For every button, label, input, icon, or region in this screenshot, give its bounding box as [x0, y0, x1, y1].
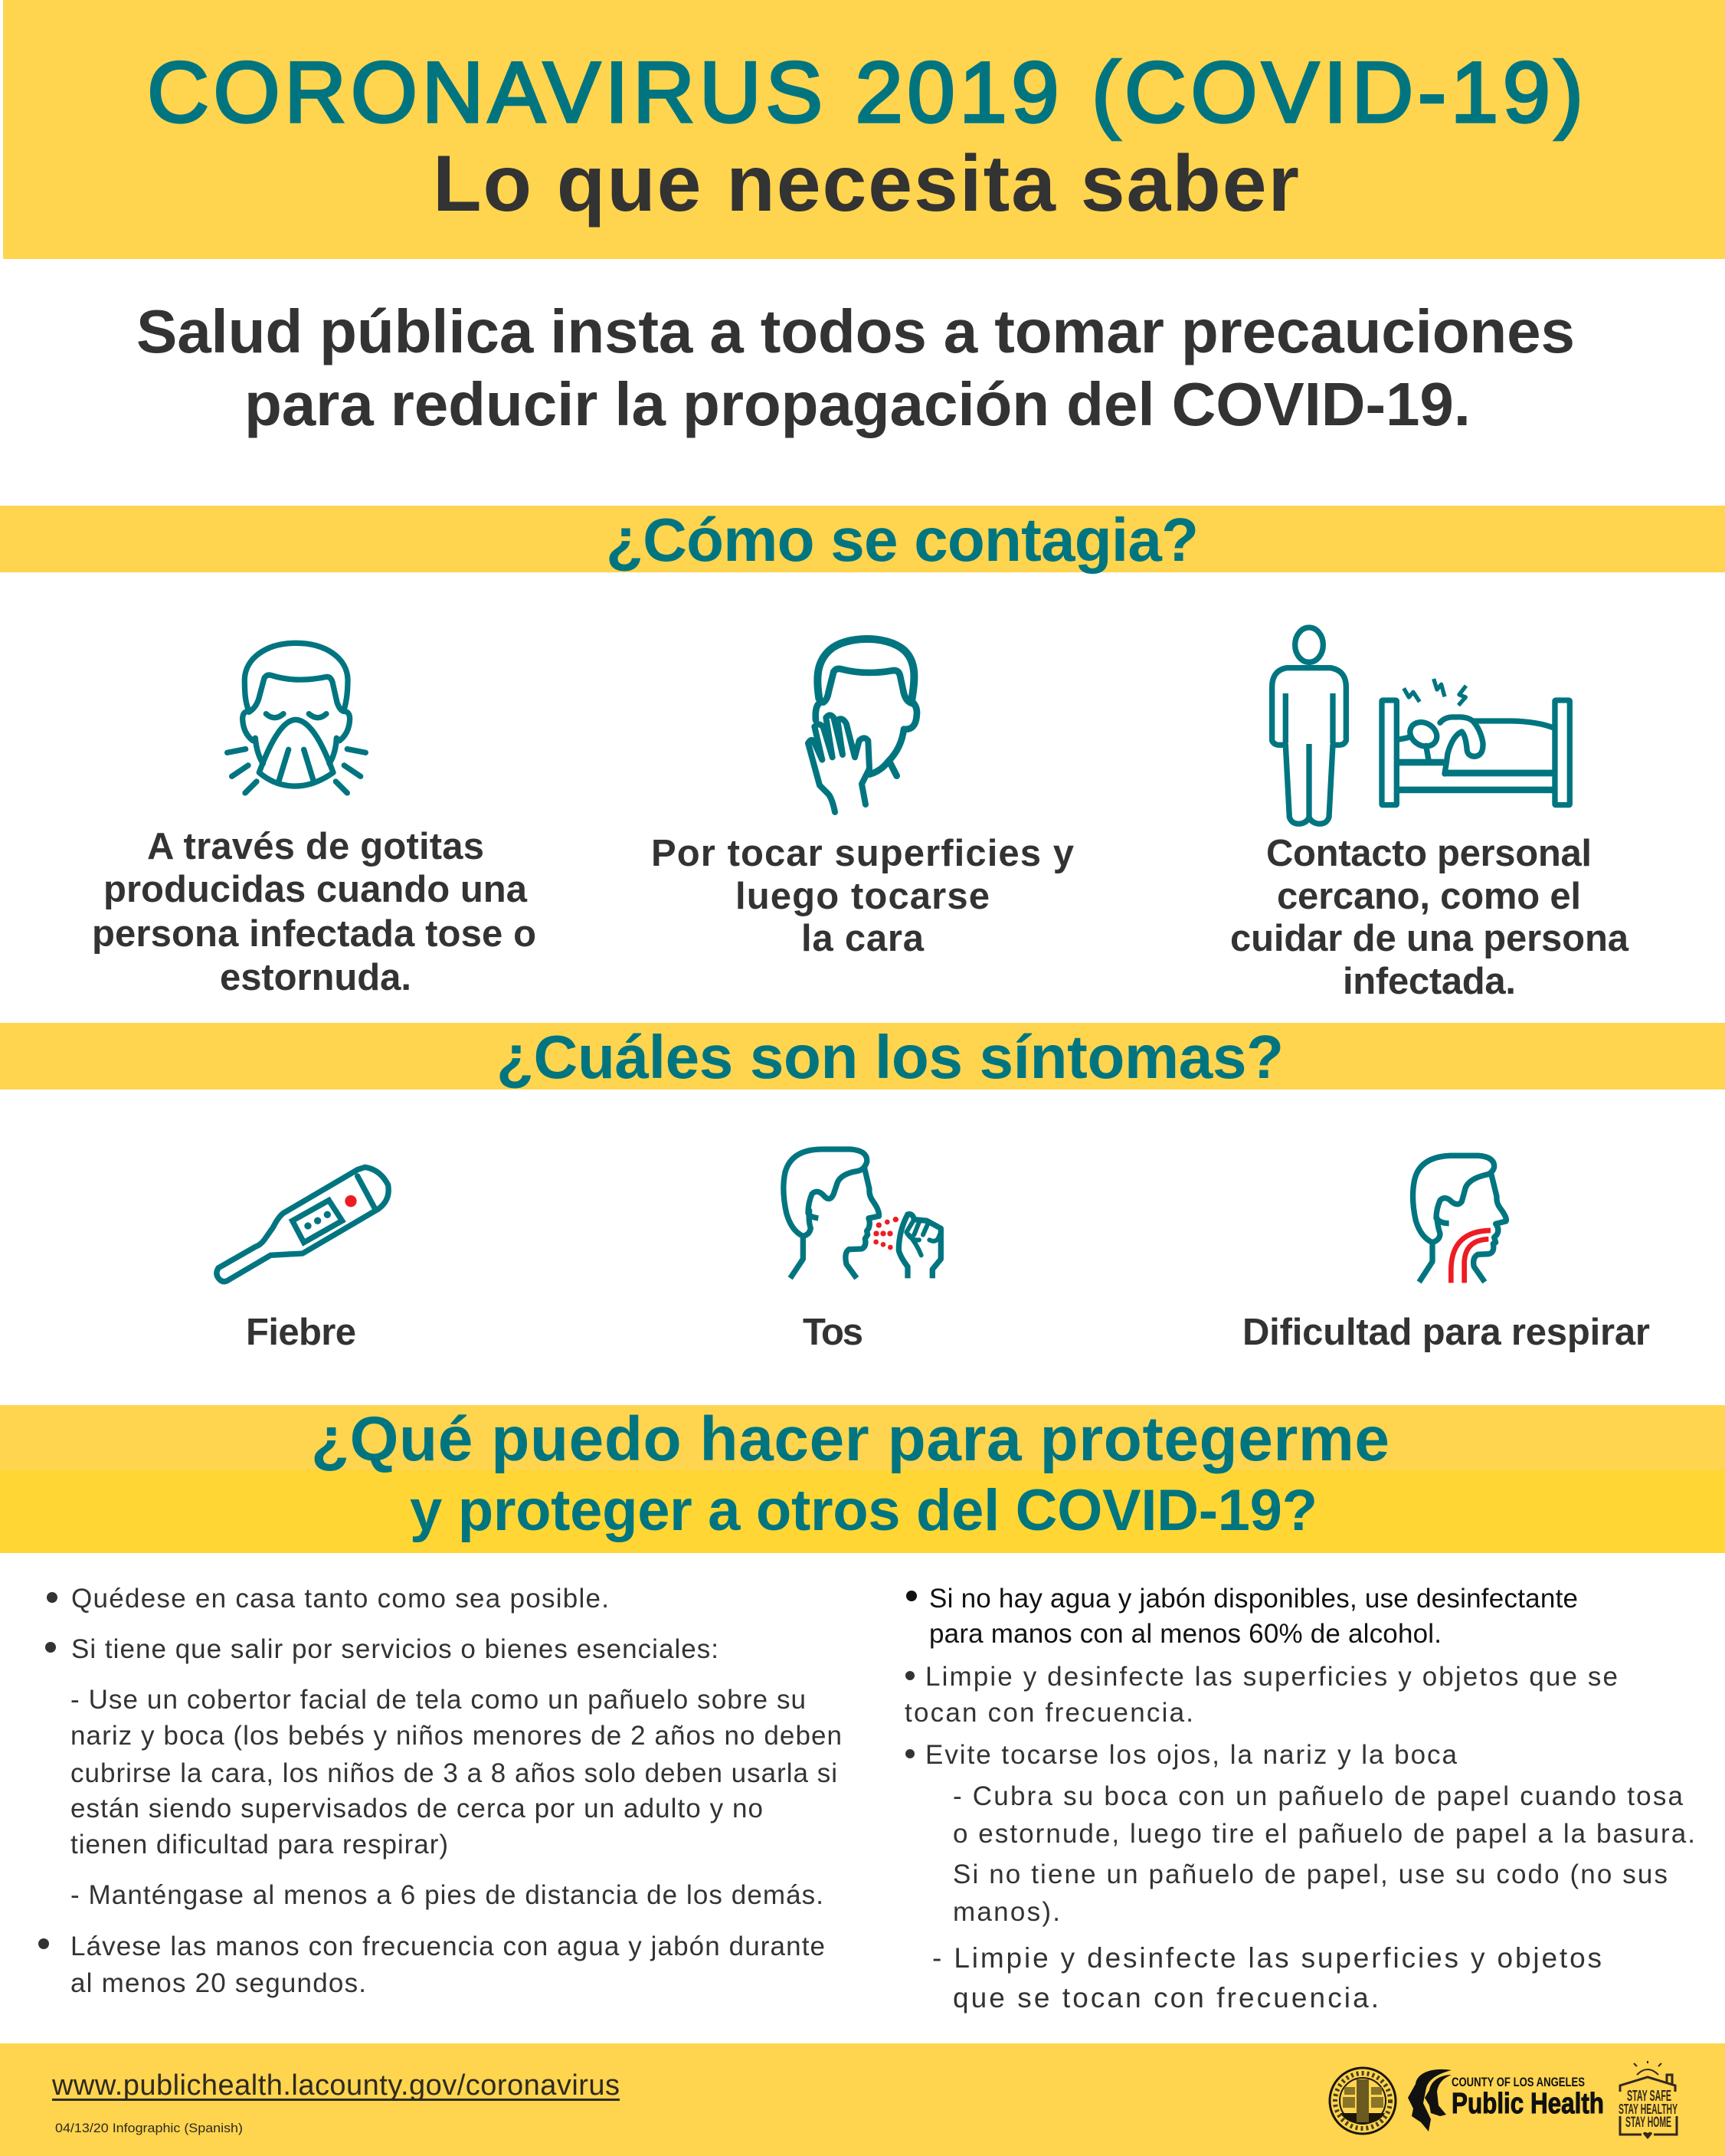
section heading: symptoms	[0, 1023, 1725, 1091]
panel: right protective advice: Limpie y desinfecte las superficies y objetos que se	[925, 1662, 1618, 1692]
section heading: symptoms: ¿Cuáles son los síntomas?	[496, 1023, 1284, 1091]
panel: right protective advice: que se tocan con frecuencia.	[953, 1982, 1379, 2013]
caption: close contact	[1230, 833, 1629, 1002]
caption: droplets: producidas cuando una	[103, 869, 528, 910]
panel: right protective advice: - Cubra su boca con un pañuelo de papel cuando tosa	[953, 1781, 1684, 1811]
panel: left protective advice: nariz y boca (los bebés y niños menores de 2 años no deben	[70, 1721, 842, 1751]
panel: left protective advice: cubrirse la cara, los niños de 3 a 8 años solo deben usarla si	[70, 1758, 837, 1788]
title: CORONAVIRUS 2019 (COVID-19)	[147, 44, 1583, 140]
panel: right protective advice: para manos con al menos 60% de alcohol.	[929, 1619, 1442, 1649]
logo mark: profiles	[1408, 2069, 1452, 2131]
logo: stay safe badge: STAY HEALTHY	[1619, 2102, 1678, 2117]
panel: touching surfaces	[651, 639, 1074, 959]
panel: right protective advice: Si no tiene un pañuelo de papel, use su codo (no sus	[953, 1859, 1668, 1889]
panel: right protective advice: tocan con frecuencia.	[905, 1698, 1193, 1728]
caption: close contact: Contacto personal	[1266, 833, 1592, 874]
panel: left protective advice: Lávese las manos con frecuencia con agua y jabón durante	[70, 1932, 825, 1961]
caption: droplets: estornuda.	[220, 957, 411, 998]
subtitle: Lo que necesita saber	[433, 139, 1299, 228]
caption: surfaces: luego tocarse	[735, 876, 990, 917]
icon: hand touching face	[808, 639, 917, 812]
logo: public health: COUNTY OF LOS ANGELES	[1452, 2075, 1585, 2089]
panel: right protective advice	[905, 1584, 1695, 2013]
panel: difficulty breathing	[1242, 1155, 1650, 1353]
header banner	[3, 0, 1725, 259]
caption: close contact: infectada.	[1343, 961, 1516, 1002]
caption: cough: Tos	[803, 1312, 863, 1353]
icon: person coughing into hand	[784, 1149, 941, 1278]
panel: left protective advice: - Manténgase al menos a 6 pies de distancia de los demás.	[70, 1880, 823, 1910]
panel: right protective advice: Evite tocarse los ojos, la nariz y la boca	[925, 1740, 1458, 1770]
logo: stay safe badge: STAY SAFE	[1627, 2088, 1671, 2105]
panel: right protective advice: manos).	[953, 1897, 1060, 1927]
caption: close contact: cercano, como el	[1277, 876, 1581, 917]
section heading: how to protect: y proteger a otros del COVID-19?	[410, 1478, 1317, 1543]
panel: left protective advice: al menos 20 segundos.	[70, 1968, 366, 1998]
section heading: how to protect	[0, 1404, 1725, 1553]
intro statement: Salud pública insta a todos a tomar precauciones	[136, 297, 1575, 365]
panel: left protective advice: Quédese en casa tanto como sea posible.	[71, 1584, 609, 1614]
panel: left protective advice: Si tiene que salir por servicios o bienes esenciales:	[71, 1634, 718, 1664]
caption: surfaces: la cara	[801, 918, 925, 959]
website link: www.publichealth.lacounty.gov/coronavirus	[51, 2069, 620, 2102]
icon: person next to sick person in bed	[1272, 627, 1570, 824]
caption: surfaces	[651, 833, 1074, 959]
caption: droplets: persona infectada tose o	[92, 913, 536, 955]
panel: cough	[784, 1149, 941, 1353]
icon: sneezing face	[227, 643, 365, 793]
logo: county seal	[1330, 2068, 1396, 2134]
logo: stay safe badge: STAY HOME	[1625, 2115, 1671, 2131]
icon: thermometer	[217, 1167, 388, 1282]
logo: public health: Public Health	[1452, 2088, 1604, 2120]
intro statement	[136, 297, 1575, 438]
panel: close contact	[1230, 627, 1629, 1002]
caption: droplets	[92, 826, 536, 998]
panel: right protective advice: Si no hay agua y jabón disponibles, use desinfectante	[929, 1584, 1578, 1614]
date note: 04/13/20 Infographic (Spanish)	[55, 2121, 243, 2135]
panel: left protective advice: - Use un cobertor facial de tela como un pañuelo sobre su	[70, 1685, 806, 1715]
panel: left protective advice: tienen dificultad para respirar)	[70, 1830, 448, 1859]
panel: right protective advice: - Limpie y desinfecte las superficies y objetos	[932, 1942, 1602, 1974]
footer band	[0, 2043, 1725, 2156]
logo: stay safe badge	[1619, 2061, 1678, 2139]
panel: right protective advice: o estornude, luego tire el pañuelo de papel a la basura.	[953, 1819, 1695, 1849]
caption: difficulty breathing: Dificultad para respirar	[1242, 1312, 1650, 1353]
panel: left protective advice	[38, 1584, 842, 1998]
intro statement: para reducir la propagación del COVID-19.	[244, 370, 1471, 438]
section heading: how it spreads	[0, 506, 1725, 574]
panel: droplets	[92, 643, 536, 998]
section heading: how it spreads: ¿Cómo se contagia?	[606, 506, 1199, 574]
logo: public health	[1408, 2069, 1604, 2131]
caption: close contact: cuidar de una persona	[1230, 918, 1629, 959]
caption: surfaces: Por tocar superficies y	[651, 833, 1074, 874]
panel: fever	[217, 1167, 388, 1353]
caption: fever: Fiebre	[246, 1312, 356, 1353]
caption: droplets: A través de gotitas	[147, 826, 484, 867]
icon: head with red airway	[1413, 1155, 1506, 1283]
panel: left protective advice: están siendo supervisados de cerca por un adulto y no	[70, 1794, 763, 1823]
section heading: how to protect: ¿Qué puedo hacer para protegerme	[311, 1404, 1389, 1474]
